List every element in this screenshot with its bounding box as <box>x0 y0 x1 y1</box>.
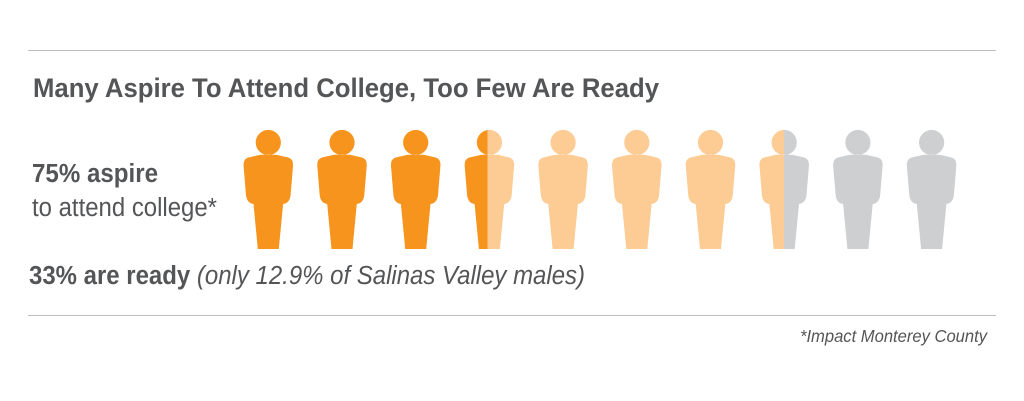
text: to attend college: to attend college* <box>32 194 217 222</box>
person 10: grey <box>907 130 956 249</box>
person 8: split light orange and grey <box>759 130 809 249</box>
person 5: aspire <box>538 130 588 249</box>
top divider <box>28 50 996 51</box>
source note: *Impact Monterey County <box>800 326 988 346</box>
text: 33% are ready: 33% are ready (only 12.9% of Salinas Valley males) <box>29 262 585 290</box>
person 4: split dark and light orange <box>465 130 514 249</box>
person 2: aspire and ready <box>317 130 367 249</box>
person 1: aspire and ready <box>243 130 293 249</box>
person 6: aspire <box>612 130 662 249</box>
text: 75% aspire: 75% aspire <box>32 160 158 188</box>
pictogram: ten people <box>243 130 956 249</box>
bottom divider <box>28 315 996 316</box>
title: Many Aspire To Attend College, Too Few Are Ready <box>33 73 659 103</box>
person 9: grey <box>833 130 883 249</box>
person 7: aspire <box>686 130 735 249</box>
person 3: aspire and ready <box>391 130 440 249</box>
